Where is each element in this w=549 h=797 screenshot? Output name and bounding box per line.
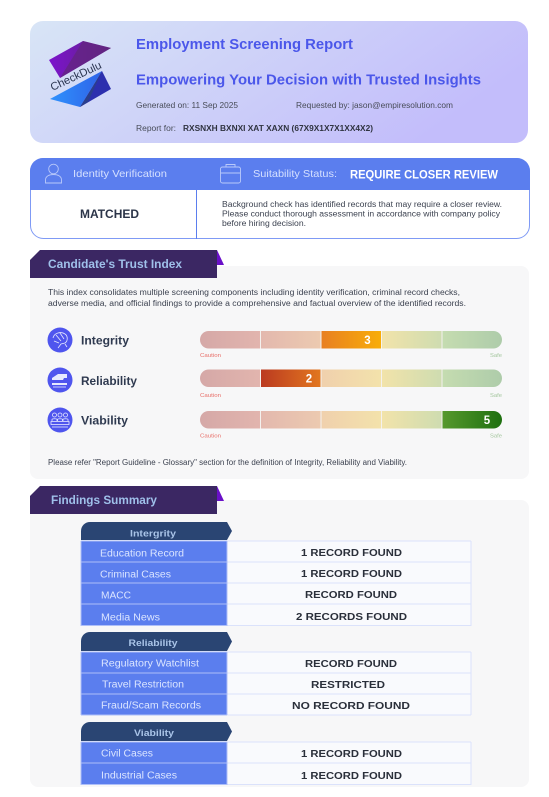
row: media news: Media News xyxy=(101,612,160,624)
bar: viability score 5: 5 xyxy=(484,415,491,427)
text: integrity label: Integrity xyxy=(81,334,129,348)
icon: person xyxy=(46,164,62,183)
row: MACC: MACC xyxy=(101,590,131,602)
heading: report title: Employment Screening Report xyxy=(136,37,353,53)
row: travel restriction: RESTRICTED xyxy=(311,679,385,691)
text: reliability label: Reliability xyxy=(81,374,137,388)
row: fraud and scam records xyxy=(101,700,410,712)
row: civil cases xyxy=(101,748,402,760)
icon: CheckDulu logo: CheckDulu xyxy=(49,60,104,94)
text: review note: before hiring decision. xyxy=(222,219,306,228)
row: regulatory watchlist: Regulatory Watchlist xyxy=(101,658,199,670)
text: viability safe: Safe xyxy=(490,434,502,440)
text: viability label: Viability xyxy=(81,414,128,428)
text: review note: Please conduct thorough assessment in accordance with company policy xyxy=(222,210,500,218)
panel: report header xyxy=(30,21,528,143)
row: media news xyxy=(101,611,407,624)
row: criminal cases: 1 RECORD FOUND xyxy=(301,568,402,580)
row: civil cases: 1 RECORD FOUND xyxy=(301,748,402,760)
table: reliability findings xyxy=(81,632,471,715)
row: criminal cases xyxy=(100,568,402,580)
text: requested by: Requested by: jason@empiresolution.com xyxy=(296,100,453,110)
heading: integrity tag xyxy=(81,522,232,540)
row: education record xyxy=(100,547,402,560)
text: report for label: Report for: xyxy=(136,123,176,133)
text: viability caution: Caution xyxy=(200,434,221,440)
row: education record: 1 RECORD FOUND xyxy=(301,547,402,559)
text: review note: Background check has identified records that may require a closer review. xyxy=(222,200,502,209)
icon: briefcase xyxy=(220,164,240,183)
row: education record: Education Record xyxy=(100,548,184,560)
bar: reliability score 2: 2 xyxy=(306,374,312,386)
row: industrial cases xyxy=(101,770,402,782)
icon: CheckDulu logo xyxy=(49,41,111,107)
text: review note xyxy=(222,200,502,228)
heading: tagline: Empowering Your Decision with Trusted Insights xyxy=(136,72,481,88)
text: status value: REQUIRE CLOSER REVIEW xyxy=(350,170,498,182)
bar: integrity score 3: 3 xyxy=(364,335,371,347)
row: travel restriction: Travel Restriction xyxy=(102,680,184,690)
table: integrity findings xyxy=(81,522,471,626)
row: MACC xyxy=(101,589,397,602)
heading: integrity tag: Intergrity xyxy=(130,528,176,538)
heading: reliability tag xyxy=(81,632,232,651)
text: glossary note: Please refer "Report Guideline - Glossary" section for the definition of Integrity, Reliability and Viability. xyxy=(48,458,407,467)
row: industrial cases: Industrial Cases xyxy=(101,770,177,782)
bar: viability score 5 xyxy=(200,411,502,429)
text: matched: MATCHED xyxy=(80,209,139,221)
bar: reliability score 2 xyxy=(200,370,502,388)
panel: findings summary xyxy=(30,486,529,787)
row: regulatory watchlist xyxy=(101,658,397,670)
text: suitability status: Suitability Status: xyxy=(253,168,337,180)
panel: trust index xyxy=(30,250,502,466)
row: industrial cases: 1 RECORD FOUND xyxy=(301,770,402,782)
heading: viability tag xyxy=(81,722,232,741)
row: regulatory watchlist: RECORD FOUND xyxy=(305,658,397,670)
panel: verification status xyxy=(30,158,530,239)
text: integrity safe: Safe xyxy=(490,353,502,359)
table: viability findings xyxy=(81,722,471,785)
row: MACC: RECORD FOUND xyxy=(305,589,397,601)
icon: integrity xyxy=(48,328,72,352)
icon: viability xyxy=(48,408,72,432)
row: civil cases: Civil Cases xyxy=(101,748,153,760)
text: identity verification: Identity Verification xyxy=(73,168,167,180)
text: generated date: Generated on: 11 Sep 2025 xyxy=(136,100,238,110)
row: criminal cases: Criminal Cases xyxy=(100,570,171,580)
heading: reliability tag: Reliability xyxy=(128,638,178,648)
heading: trust index banner xyxy=(30,250,224,278)
heading: findings banner xyxy=(30,486,224,514)
text: integrity caution: Caution xyxy=(200,353,221,359)
text: index description: This index consolidates multiple screening components including identity verification, criminal record checks, xyxy=(48,288,460,297)
text: candidate id: RXSNXH BXNXI XAT XAXN (67X9X1X7X1XX4X2) xyxy=(183,124,373,133)
heading: viability tag: Viability xyxy=(134,728,174,738)
text: index description xyxy=(48,288,466,308)
row: fraud and scam records: Fraud/Scam Records xyxy=(101,700,201,712)
row: media news: 2 RECORDS FOUND xyxy=(296,611,407,623)
text: reliability safe: Safe xyxy=(490,393,502,399)
icon: reliability xyxy=(48,368,72,392)
heading: trust index banner: Candidate's Trust Index xyxy=(48,259,183,271)
bar: integrity score 3 xyxy=(200,331,502,349)
heading: findings banner: Findings Summary xyxy=(51,495,158,507)
text: reliability caution: Caution xyxy=(200,393,221,399)
row: fraud and scam records: NO RECORD FOUND xyxy=(292,700,410,712)
row: travel restriction xyxy=(102,679,385,691)
text: index description: adverse media, and official findings to provide a comprehensive and factual overview of the identified records. xyxy=(48,299,466,308)
